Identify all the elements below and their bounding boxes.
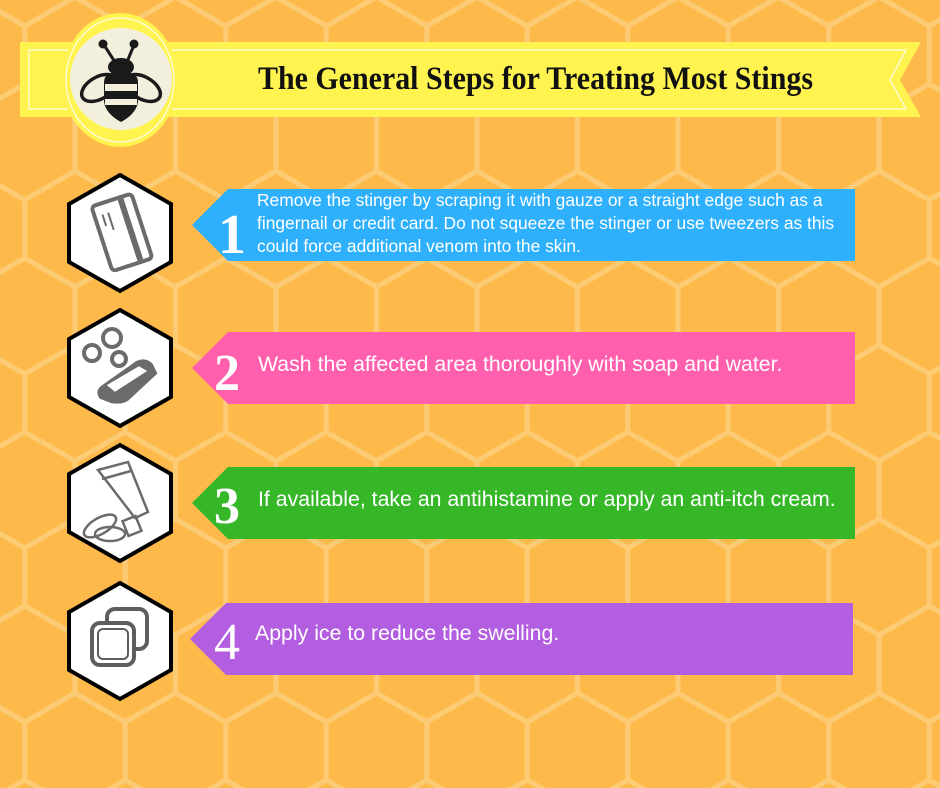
- step 3: If available, take an antihistamine or apply an anti-itch cream.: [258, 487, 836, 511]
- banner 4: 4: [214, 614, 240, 671]
- title banner: [20, 13, 921, 147]
- step 1: Remove the stinger by scraping it with gauze or a straight edge such as a fingernail or credit card. Do not squeeze the stinger or use tweezers as this could force additional venom into the skin.: [257, 190, 834, 256]
- icon: soap hexagon: [67, 308, 173, 428]
- step 4: Apply ice to reduce the swelling.: [255, 621, 559, 645]
- banner 2: 2: [214, 345, 240, 402]
- ribbon: [20, 42, 921, 117]
- step 2: [67, 308, 855, 428]
- icon: bee: [77, 40, 165, 122]
- step 1: [67, 172, 855, 294]
- step 2: Wash the affected area thoroughly with soap and water.: [258, 352, 782, 376]
- icon: cream and pills hexagon: [67, 442, 173, 564]
- step 4: [67, 580, 853, 702]
- step 3: [67, 442, 855, 564]
- icon: ice cubes hexagon: [67, 580, 173, 702]
- banner 3: 3: [214, 478, 240, 535]
- bee medallion: [62, 13, 178, 147]
- title text: The General Steps for Treating Most Stings: [258, 61, 813, 97]
- banner 2: [192, 332, 855, 404]
- banner 1: [192, 189, 855, 261]
- icon: credit card hexagon: [67, 172, 173, 294]
- banner 3: [192, 467, 855, 539]
- banner 4: [190, 603, 853, 675]
